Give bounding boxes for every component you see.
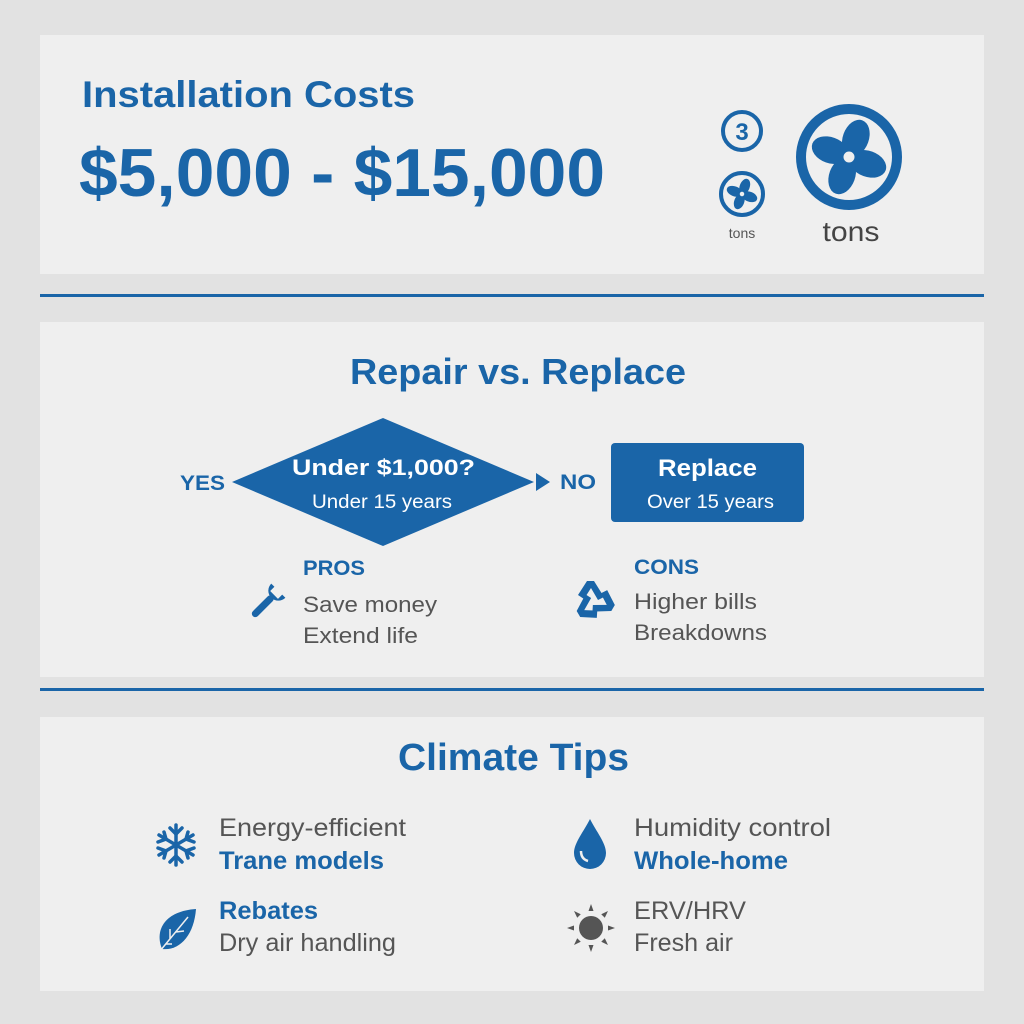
icon: water drop bbox=[574, 819, 606, 869]
cons text: Higher bills bbox=[634, 589, 757, 614]
decision diamond: Under 15 years bbox=[312, 492, 452, 513]
tip: rebates bbox=[219, 897, 396, 957]
label: no: NO bbox=[560, 471, 596, 494]
panel: installation costs bbox=[40, 35, 984, 274]
panel: repair vs replace bbox=[40, 322, 984, 677]
pros text: PROS bbox=[303, 557, 365, 580]
tip: energy-efficient: Energy-efficient bbox=[219, 814, 406, 842]
tip: erv/hrv bbox=[634, 897, 746, 957]
cons text: Breakdowns bbox=[634, 620, 767, 645]
icon: 3 badge: 3 bbox=[735, 119, 749, 146]
tip: energy-efficient bbox=[219, 814, 406, 875]
tip: humidity control bbox=[634, 814, 831, 875]
pros text bbox=[303, 557, 437, 648]
heading: repair vs replace: Repair vs. Replace bbox=[350, 351, 686, 392]
icon: wrench bbox=[246, 584, 285, 623]
replace box: Over 15 years bbox=[647, 492, 774, 513]
icon: recycle bbox=[572, 581, 619, 625]
tip: rebates: Dry air handling bbox=[219, 929, 396, 957]
decision diamond: Under $1,000? bbox=[292, 455, 475, 480]
tip: humidity control: Humidity control bbox=[634, 814, 831, 842]
cons text bbox=[634, 556, 767, 645]
heading: installation costs: Installation Costs bbox=[82, 74, 415, 115]
icon: sun bbox=[567, 904, 615, 952]
tip: erv/hrv: Fresh air bbox=[634, 929, 733, 957]
arrow bbox=[536, 473, 550, 491]
price range: $5,000 - $15,000 bbox=[79, 135, 605, 211]
panel: climate tips bbox=[40, 717, 984, 991]
icon: 3 badge bbox=[723, 112, 761, 150]
tip: erv/hrv: ERV/HRV bbox=[634, 897, 746, 925]
replace box: Replace bbox=[658, 455, 757, 482]
icon: leaf bbox=[160, 909, 196, 951]
icon: small fan bbox=[721, 173, 763, 215]
heading: climate tips: Climate Tips bbox=[398, 737, 629, 779]
pros text: Extend life bbox=[303, 623, 418, 648]
pros text: Save money bbox=[303, 592, 437, 617]
label: yes: YES bbox=[180, 472, 225, 495]
icon: snowflake bbox=[158, 825, 194, 865]
label: small tons: tons bbox=[729, 225, 755, 241]
replace box bbox=[611, 443, 804, 522]
tip: energy-efficient: Trane models bbox=[219, 847, 384, 875]
icon: large fan bbox=[801, 109, 897, 205]
cons text: CONS bbox=[634, 556, 699, 579]
label: large tons: tons bbox=[822, 216, 880, 247]
decision diamond bbox=[232, 418, 534, 546]
tip: humidity control: Whole-home bbox=[634, 847, 788, 875]
tip: rebates: Rebates bbox=[219, 897, 318, 925]
